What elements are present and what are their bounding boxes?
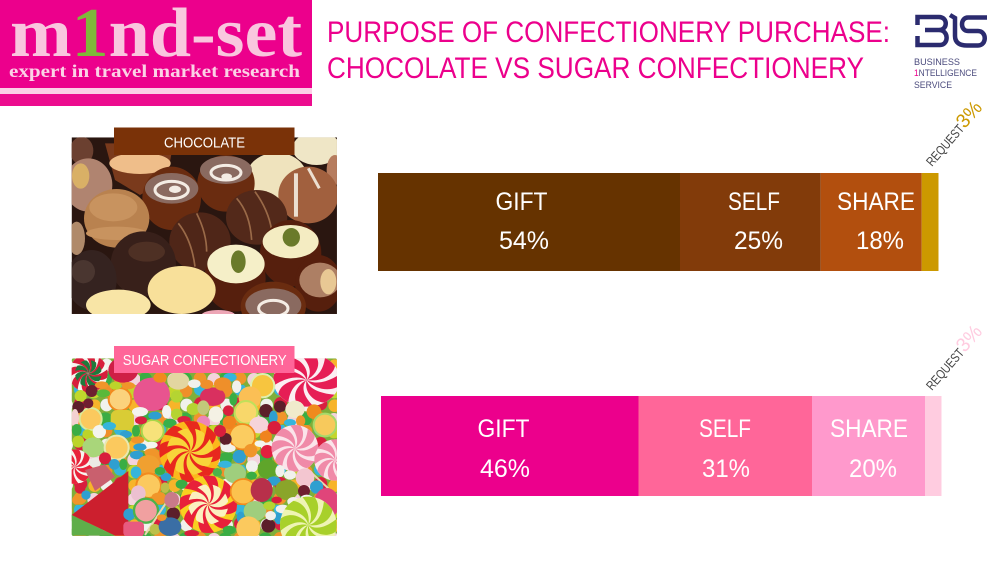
segment: gift 54%: 54% <box>499 227 549 255</box>
segment: share 20%: SHARE <box>830 415 908 443</box>
segment: share 20%: 20% <box>849 455 897 483</box>
callout: chocolate request 3% <box>919 97 987 170</box>
segment: share 18%: SHARE <box>837 188 915 216</box>
segment: self 25%: SELF <box>728 188 780 216</box>
segment: request 3% <box>922 173 938 271</box>
segment: self 31% <box>638 396 812 496</box>
callout: sugar request 3% <box>919 321 987 394</box>
segment: gift 46%: GIFT <box>478 415 530 443</box>
label: sugar confectionery <box>114 346 294 373</box>
photo: sweets <box>72 358 337 536</box>
label: sugar confectionery: SUGAR CONFECTIONERY <box>123 352 287 369</box>
photo: chocolates <box>72 137 337 314</box>
title: PURPOSE OF CONFECTIONERY PURCHASE: <box>327 16 890 49</box>
callout: chocolate request 3%: REQUEST <box>923 121 967 169</box>
title <box>327 16 890 85</box>
segment: self 31%: 31% <box>702 455 750 483</box>
title: CHOCOLATE VS SUGAR CONFECTIONERY <box>327 52 864 85</box>
logo: mind-set: expert in travel market research <box>9 61 300 81</box>
segment: gift 46% <box>381 396 638 496</box>
segment: gift 54% <box>378 173 680 271</box>
bar chart: sugar confectionery <box>381 396 942 496</box>
segment: gift 54%: GIFT <box>496 188 548 216</box>
bar chart: chocolate <box>378 173 938 271</box>
callout: chocolate request 3%: 3% <box>952 97 987 133</box>
segment: self 25% <box>680 173 821 271</box>
segment: gift 46%: 46% <box>480 455 530 483</box>
logo: BIS: SERVICE <box>914 80 952 90</box>
label: chocolate <box>114 128 294 155</box>
segment: share 18%: 18% <box>856 227 904 255</box>
segment: self 31%: SELF <box>699 415 751 443</box>
segment: request 3% <box>925 396 942 496</box>
logo: BIS: 1NTELLIGENCE <box>914 68 977 78</box>
logo: BIS: BUSINESS <box>914 57 960 67</box>
callout: sugar request 3%: REQUEST <box>923 345 967 393</box>
segment: share 20% <box>812 396 925 496</box>
label: chocolate: CHOCOLATE <box>164 134 245 151</box>
logo: BIS <box>914 15 987 90</box>
callout: sugar request 3%: 3% <box>952 321 987 357</box>
logo: mind-set <box>0 0 312 106</box>
segment: self 25%: 25% <box>734 227 783 255</box>
segment: share 18% <box>821 173 922 271</box>
